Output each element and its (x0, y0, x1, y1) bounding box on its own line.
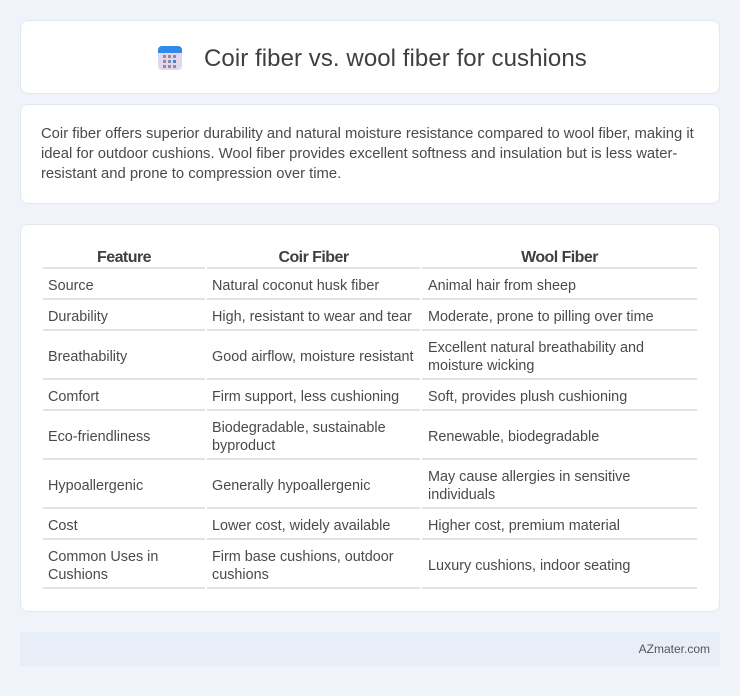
comparison table: moisture wicking (428, 358, 534, 374)
intro text card (20, 104, 720, 204)
comparison table: Common Uses in (48, 549, 158, 565)
row: hypoallergenic (43, 469, 697, 509)
footer bar (20, 632, 720, 666)
comparison table: Durability (48, 309, 108, 325)
footer source: AZmater.com (639, 642, 710, 656)
comparison table (43, 249, 697, 589)
intro paragraph: ideal for outdoor cushions. Wool fiber provides excellent softness and insulation but is less water- (41, 146, 677, 162)
table header: Coir Fiber (278, 249, 349, 266)
title: Coir fiber vs. wool fiber for cushions (204, 45, 587, 72)
comparison table: Animal hair from sheep (428, 278, 576, 294)
comparison table: Firm base cushions, outdoor (212, 549, 394, 565)
table header (43, 249, 697, 269)
comparison table: individuals (428, 487, 495, 503)
comparison table: Source (48, 278, 94, 294)
comparison table card (20, 224, 720, 612)
comparison table: Comfort (48, 389, 99, 405)
row: cost (43, 518, 697, 540)
comparison table: May cause allergies in sensitive (428, 469, 630, 485)
comparison table: Natural coconut husk fiber (212, 278, 379, 294)
title card (20, 20, 720, 94)
comparison table: Breathability (48, 349, 127, 365)
row: common uses (43, 549, 697, 589)
intro paragraph: Coir fiber offers superior durability and natural moisture resistance compared to wool fiber, making it (41, 126, 694, 142)
row: durability (43, 309, 697, 331)
comparison table: High, resistant to wear and tear (212, 309, 412, 325)
comparison table: Soft, provides plush cushioning (428, 389, 627, 405)
comparison table: Eco-friendliness (48, 429, 150, 445)
row: source (43, 278, 697, 300)
comparison table: byproduct (212, 438, 275, 454)
table header: Feature (97, 249, 151, 266)
comparison table: Excellent natural breathability and (428, 340, 644, 356)
comparison table: Firm support, less cushioning (212, 389, 399, 405)
comparison table: Lower cost, widely available (212, 518, 390, 534)
comparison table: Higher cost, premium material (428, 518, 620, 534)
intro paragraph: resistant and prone to compression over time. (41, 166, 341, 182)
comparison table: Cushions (48, 567, 108, 583)
comparison table: Cost (48, 518, 78, 534)
intro paragraph (41, 126, 694, 182)
comparison table: cushions (212, 567, 269, 583)
comparison table: Biodegradable, sustainable (212, 420, 386, 436)
comparison table: Luxury cushions, indoor seating (428, 558, 630, 574)
comparison table: Hypoallergenic (48, 478, 143, 494)
table header: Wool Fiber (521, 249, 598, 266)
icon: calendar (158, 46, 182, 70)
row: eco-friendliness (43, 420, 697, 460)
comparison table: Moderate, prone to pilling over time (428, 309, 654, 325)
row: breathability (43, 340, 697, 380)
comparison table: Renewable, biodegradable (428, 429, 599, 445)
comparison table: Generally hypoallergenic (212, 478, 370, 494)
row: comfort (43, 389, 697, 411)
comparison table: Good airflow, moisture resistant (212, 349, 414, 365)
